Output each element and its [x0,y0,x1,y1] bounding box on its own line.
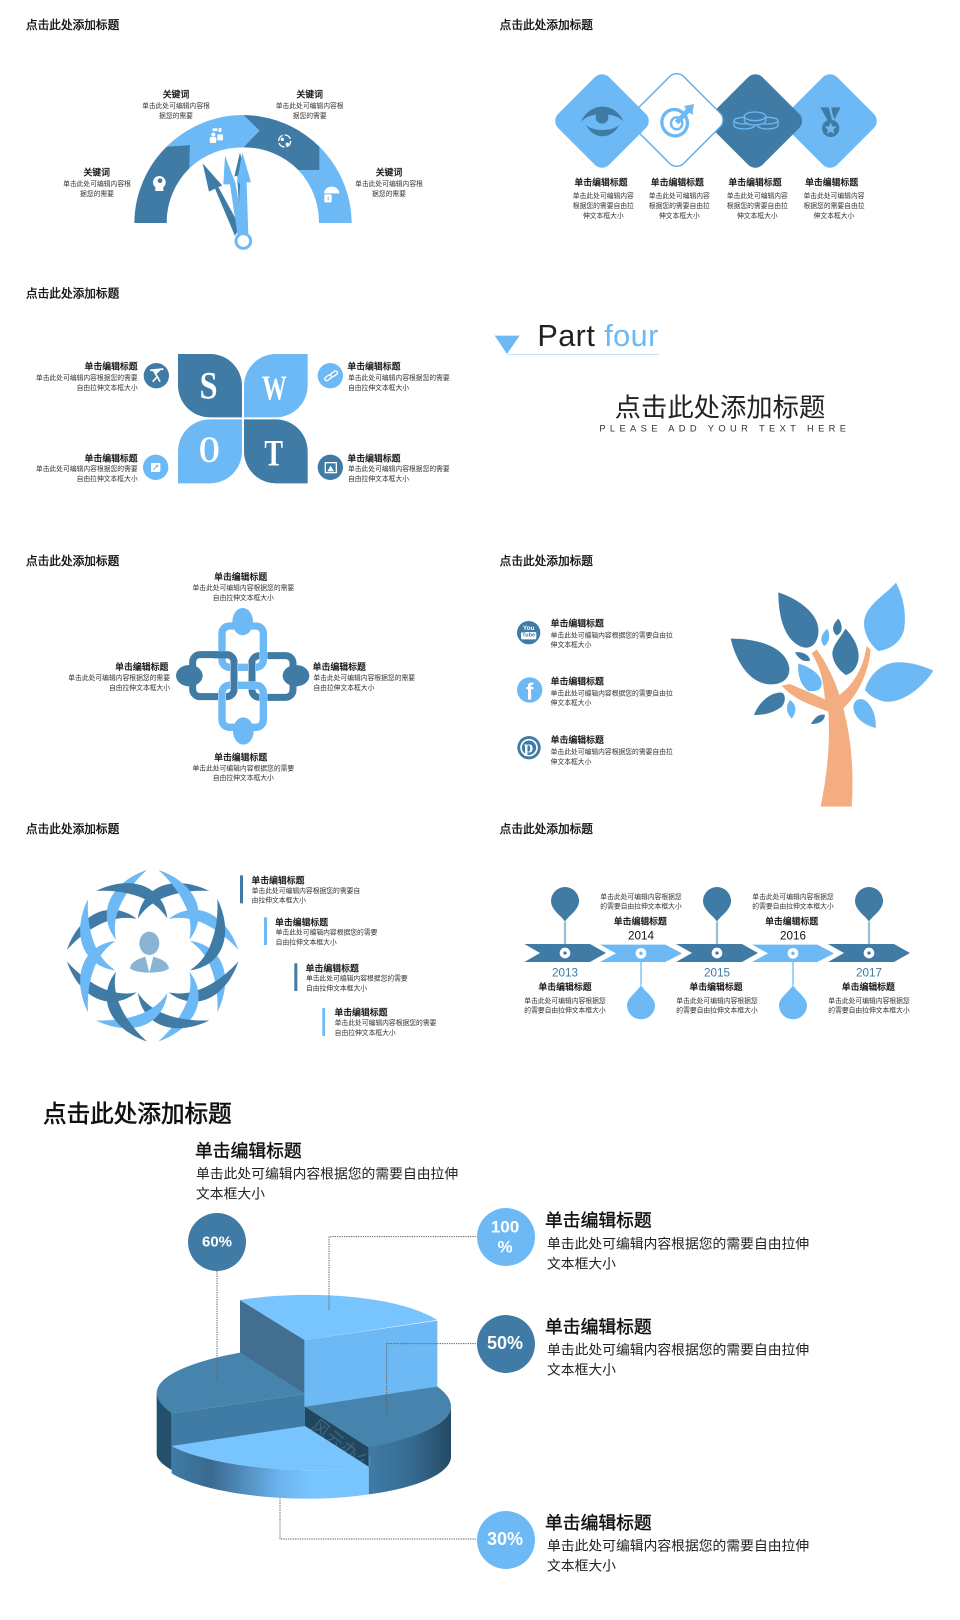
label: S: 单击编辑标题 [84,361,138,372]
label: right: 据您的需要 [372,189,406,198]
title: 点击此处添加标题 [43,1101,232,1128]
milestone 2013: 2013 [552,966,578,979]
icon: cycle [279,135,291,147]
label: item 2: 单击此处可编辑内容根据您的需要自由拉 [551,688,673,697]
label: right: 自由拉伸文本框大小 [313,683,375,692]
label: upper left: 关键词 [163,89,189,100]
label: item 3: 伸文本框大小 [551,757,592,766]
interlocked links [176,608,309,745]
panel: chain links [26,554,415,782]
label: W: 单击编辑标题 [347,361,401,372]
label: top [192,571,294,602]
label: item 1: 伸文本框大小 [551,640,592,649]
label: item 1 [551,617,673,649]
milestone 2017: 2017 [856,966,882,979]
milestone 2017 [828,966,910,1014]
milestone 2014 [600,892,682,942]
label: right: 单击此处可编辑内容根据您的需要 [313,673,415,682]
label: item 3 [551,734,673,766]
label: left [68,661,170,692]
petal: O: O [199,430,220,471]
label: bottom: 自由拉伸文本框大小 [213,773,274,782]
milestone 2015: 2015 [704,966,730,979]
icon: target [658,104,694,140]
label: 30%: 文本框大小 [547,1558,616,1574]
label: T: 单击此处可编辑内容根据您的需要 [348,464,450,473]
label: column 1 [573,177,634,220]
label: left: 单击此处可编辑内容根 [63,179,131,188]
label: T: 自由拉伸文本框大小 [348,474,409,483]
label: right: 单击此处可编辑内容根 [355,179,423,188]
milestone 2017: 的需要自由拉伸文本框大小 [828,1005,910,1014]
petal: T [244,419,308,483]
label: 50%: 单击此处可编辑内容根据您的需要自由拉伸 [547,1342,809,1358]
icon: warning window [318,455,343,480]
label: 30%: 单击此处可编辑内容根据您的需要自由拉伸 [547,1538,809,1554]
milestone 2014: 单击编辑标题 [614,916,667,927]
petal: S [178,354,242,417]
needles [203,152,251,248]
milestone 2016: 的需要自由拉伸文本框大小 [752,901,834,910]
bar and label 1: 单击编辑标题 [251,875,305,886]
label: upper right: 单击此处可编辑内容根 [276,101,344,110]
label: O [36,452,138,483]
bar and label 3: 自由拉伸文本框大小 [306,983,367,992]
title: 点击此处添加标题 [26,554,120,568]
label: bottom: 单击此处可编辑内容根据您的需要 [192,763,294,772]
bar and label 1: 单击此处可编辑内容根据您的需要自 [252,886,360,895]
label: O: 单击此处可编辑内容根据您的需要 [36,464,138,473]
bar and label 1: 由拉伸文本框大小 [252,895,306,904]
label: T [347,452,450,483]
label: upper right [276,89,344,120]
title: 点击此处添加标题 [26,822,120,836]
icon: pinterest: p [524,737,533,756]
label: 100% [545,1210,809,1272]
icon: umbrella [324,187,339,202]
label: left: 关键词 [83,167,110,178]
flower crescents [61,864,244,1047]
label: 100%: 单击编辑标题 [545,1210,652,1230]
label: 60%: 单击编辑标题 [195,1141,302,1161]
label: 50%: 单击编辑标题 [545,1317,652,1337]
label: item 2: 伸文本框大小 [551,698,592,707]
label: 60%: 单击此处可编辑内容根据您的需要自由拉伸 [196,1166,458,1182]
bar and label 3: 单击编辑标题 [306,962,359,973]
label: item 2 [551,676,673,707]
milestone 2017: 单击编辑标题 [842,981,895,992]
tree leaves [731,583,933,728]
title: 点击此处添加标题 [500,18,593,32]
3D pie chart: 风云办公 [307,1415,376,1476]
label: 50%: 文本框大小 [547,1362,616,1378]
label: bottom: 单击编辑标题 [214,751,267,762]
label: 30% [545,1513,809,1574]
label: column 4: 单击编辑标题 [805,177,858,188]
milestone 2016 [752,892,834,942]
title: 点击此处添加标题 [26,286,120,300]
icon: triangle marker [495,336,520,354]
label: column 3: 单击此处可编辑内容 [727,191,788,200]
label: right: 关键词 [376,167,402,178]
label: upper right: 据您的需要 [293,111,327,120]
subtitle: PLEASE ADD YOUR TEXT HERE [599,423,846,433]
bar and label 3: 单击此处可编辑内容根据您的需要 [306,973,408,982]
milestone 2013: 单击编辑标题 [538,981,592,992]
badge: 50%: 50% [487,1333,523,1353]
gauge arc [134,115,352,223]
bar and label 2: 单击此处可编辑内容根据您的需要 [276,927,378,936]
label: column 2: 伸文本框大小 [659,211,700,220]
icon: youtube: You [523,625,535,632]
label: column 4: 伸文本框大小 [814,211,855,220]
label: right [355,167,423,198]
label: column 1: 单击编辑标题 [574,177,628,188]
label: left: 据您的需要 [80,189,114,198]
label: upper left: 单击此处可编辑内容根 [142,101,210,110]
icon: facebook [517,677,542,704]
icon: coins [734,112,778,129]
label: column 2: 单击编辑标题 [651,177,704,188]
badge: 100% [477,1208,535,1266]
label: column 2: 根据您的需要自由拉 [649,201,710,210]
label: upper left [142,89,210,120]
label: column 4: 单击此处可编辑内容 [803,191,865,200]
diamond row [551,70,881,172]
icon: eye [581,107,624,136]
label: column 4: 根据您的需要自由拉 [803,201,865,210]
milestone 2015: 单击编辑标题 [689,981,743,992]
label: item 1: 单击编辑标题 [551,617,604,628]
label: upper right: 关键词 [296,89,323,100]
label: right [313,661,415,692]
label: O: 单击编辑标题 [84,452,138,463]
icon: chain [318,363,343,388]
label: column 3: 伸文本框大小 [737,211,778,220]
label: 60%: 文本框大小 [196,1186,265,1202]
milestone 2016: 单击此处可编辑内容根据您 [752,892,834,901]
label: item 3: 单击此处可编辑内容根据您的需要自由拉 [551,747,673,756]
badge: 60% [188,1213,246,1271]
label: column 1: 单击此处可编辑内容 [573,191,634,200]
label: upper left: 据您的需要 [159,111,193,120]
bar and label 4: 单击编辑标题 [334,1007,388,1018]
label: column 3 [727,177,788,220]
icon: arrow square [143,455,168,480]
petal: O [178,419,242,483]
label: W [347,361,450,392]
label: T: 单击编辑标题 [347,452,401,463]
icon: medal [820,107,841,137]
icon: people [210,128,223,143]
panel: flower diagram [26,822,437,1047]
label: 50% [545,1317,809,1378]
bar and label 4: 自由拉伸文本框大小 [335,1028,396,1037]
icon: weightlifter [144,363,169,388]
badge: 100%: % [497,1238,513,1256]
milestone 2015: 单击此处可编辑内容根据您 [676,996,758,1005]
bar and label 3 [294,962,408,992]
petal: S: S [200,363,218,407]
title: 点击此处添加标题 [500,554,593,568]
title: 点击此处添加标题 [500,822,593,836]
icon: pinterest [517,736,541,759]
icon: youtube: Tube [522,633,535,639]
3D pie chart [157,1295,451,1499]
petal: W [244,354,308,417]
label: 60% [195,1141,458,1202]
label: W: 单击此处可编辑内容根据您的需要 [348,373,450,382]
label: item 1: 单击此处可编辑内容根据您的需要自由拉 [551,630,673,639]
panel: SWOT [26,286,450,483]
label: column 1: 伸文本框大小 [583,211,624,220]
badge: 30% [477,1511,535,1569]
badge: 30%: 30% [487,1529,523,1549]
bar and label 2: 自由拉伸文本框大小 [276,937,337,946]
milestone 2013: 的需要自由拉伸文本框大小 [524,1005,606,1014]
label: bottom [192,751,294,782]
bar and label 2 [264,916,378,946]
label: W: 自由拉伸文本框大小 [348,383,409,392]
bar and label 1 [240,875,360,904]
label: column 2 [649,177,710,220]
bar and label 2: 单击编辑标题 [275,916,328,927]
label: item 2: 单击编辑标题 [551,676,604,687]
pins and stems [551,887,883,1019]
milestone 2016: 2016 [780,929,806,942]
icon: head with bulb [153,176,166,191]
icon: youtube [517,621,540,644]
part heading: Part four [537,319,658,353]
label: O: 自由拉伸文本框大小 [77,474,138,483]
label: column 4 [803,177,865,220]
rule [508,353,659,356]
section title: 点击此处添加标题 [615,392,825,422]
milestone 2014: 单击此处可编辑内容根据您 [600,892,682,901]
bar and label 4 [322,1007,437,1037]
badge: 60%: 60% [202,1234,232,1250]
label: right: 单击编辑标题 [313,661,366,672]
panel: 3D pie [43,1101,809,1574]
milestone 2013 [524,966,606,1014]
label: left: 单击编辑标题 [115,661,168,672]
label: S: 单击此处可编辑内容根据您的需要 [36,373,138,382]
leader lines [217,1237,476,1539]
label: column 3: 根据您的需要自由拉 [727,201,788,210]
panel: part four section [495,319,846,433]
icon: person [130,932,169,973]
label: S [36,361,138,392]
milestone 2017: 单击此处可编辑内容根据您 [828,996,910,1005]
label: left [63,167,131,198]
panel: gauge diagram [26,18,423,248]
label: top: 单击编辑标题 [214,571,267,582]
tree trunk [782,646,871,807]
panel: tree and social [500,554,933,807]
label: left: 自由拉伸文本框大小 [109,683,170,692]
milestone 2014: 的需要自由拉伸文本框大小 [600,901,682,910]
petal: T: T [264,434,283,474]
label: left: 单击此处可编辑内容根据您的需要 [68,673,170,682]
milestone 2013: 单击此处可编辑内容根据您 [524,996,606,1005]
label: 30%: 单击编辑标题 [545,1513,652,1533]
bar and label 4: 单击此处可编辑内容根据您的需要 [335,1018,437,1027]
milestone 2015: 的需要自由拉伸文本框大小 [676,1005,758,1014]
label: top: 单击此处可编辑内容根据您的需要 [192,583,294,592]
label: column 1: 根据您的需要自由拉 [573,201,634,210]
badge: 100%: 100 [491,1218,519,1236]
label: column 3: 单击编辑标题 [728,177,782,188]
badge: 50% [477,1315,535,1373]
label: item 3: 单击编辑标题 [551,734,604,745]
panel: diamonds [500,18,881,220]
label: 100%: 文本框大小 [547,1256,616,1272]
petal: W: W [262,368,287,408]
milestone 2015 [676,966,758,1014]
label: 100%: 单击此处可编辑内容根据您的需要自由拉伸 [547,1236,809,1252]
panel: timeline [500,822,910,1019]
milestone 2016: 单击编辑标题 [765,916,818,927]
label: top: 自由拉伸文本框大小 [213,593,274,602]
icon: facebook: f [526,678,534,704]
label: column 2: 单击此处可编辑内容 [649,191,710,200]
milestone 2014: 2014 [628,929,654,942]
chevron arrows [524,944,910,962]
label: S: 自由拉伸文本框大小 [77,383,138,392]
title: 点击此处添加标题 [26,18,120,32]
